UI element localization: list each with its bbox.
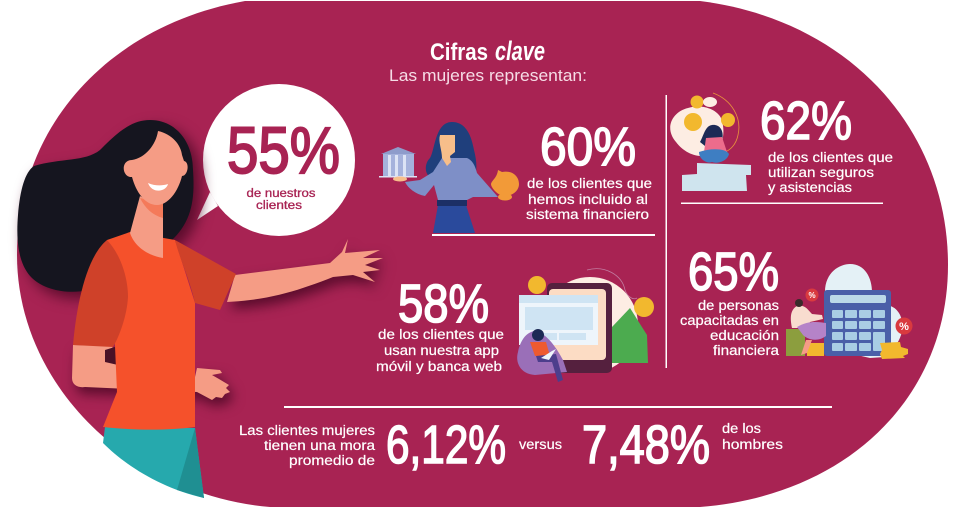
stat: 58%: 58%	[398, 274, 489, 334]
woman hair	[532, 329, 544, 341]
stat: 62%: de los clientes que	[768, 150, 893, 165]
coins	[880, 342, 908, 359]
stat: 58%: usan nuestra app	[384, 343, 499, 358]
woman top	[791, 306, 823, 328]
stat: 60%: hemos incluido al	[528, 192, 648, 207]
calculator body	[824, 290, 891, 356]
browser bar	[519, 295, 598, 303]
woman leg	[801, 340, 812, 355]
stat: 58%: de los clientes que	[378, 327, 504, 342]
men's note: hombres	[722, 437, 783, 452]
men's note	[722, 421, 783, 452]
bottom note: women's arrears: Las clientes mujeres	[239, 423, 375, 438]
orbit	[713, 93, 739, 152]
skirt	[433, 205, 475, 233]
divider lines	[284, 95, 883, 408]
percent bubble large: %	[899, 321, 909, 333]
coin left	[528, 276, 546, 294]
icon: calculator with woman and coins	[786, 264, 912, 359]
trousers	[103, 427, 204, 498]
title: clave	[495, 36, 545, 66]
icon: tablet, browser, money and woman on beanbag	[517, 269, 654, 382]
stat: 62%: 62%	[760, 91, 852, 151]
stat: 65%: educación	[710, 328, 779, 343]
banknotes	[612, 308, 648, 363]
calculator display	[830, 295, 886, 303]
speech bubble: 55%: 55%	[227, 113, 340, 187]
stat: 6,12%: 6,12%	[386, 415, 506, 475]
coin right	[634, 297, 654, 317]
stack of papers	[682, 163, 751, 191]
shirt	[103, 232, 195, 430]
title	[430, 36, 545, 66]
title: Cifras	[430, 39, 488, 66]
face	[124, 131, 188, 205]
speech bubble: 55%	[197, 84, 355, 236]
versus label: versus	[519, 437, 562, 452]
icon: woman meditating on stacks with coins	[670, 93, 751, 191]
woman hair	[795, 299, 803, 307]
calculator keys	[832, 310, 885, 351]
body	[704, 137, 727, 152]
beanbag	[517, 331, 567, 375]
hand left	[393, 176, 407, 182]
bank	[379, 147, 417, 178]
stat: 65%: de personas	[698, 298, 779, 313]
right sleeve	[175, 240, 236, 310]
stat: 60%: sistema financiero	[526, 207, 649, 222]
stat: 65%: capacitadas en	[680, 313, 779, 328]
icon: woman with bank and piggy bank	[379, 122, 519, 233]
belt	[437, 200, 467, 206]
woman skirt	[797, 322, 826, 340]
subtitle: Las mujeres representan:	[389, 67, 587, 85]
hair	[426, 122, 476, 185]
money stack	[786, 329, 805, 356]
stat: 60%: de los clientes que	[527, 176, 652, 191]
stat: 7,48%: 7,48%	[582, 415, 710, 475]
bottom note: women's arrears: promedio de	[289, 453, 375, 468]
back circle	[542, 277, 638, 373]
hand right	[498, 194, 512, 200]
tablet screen	[549, 289, 606, 360]
cloud	[825, 264, 903, 358]
legs	[699, 149, 729, 163]
squiggle	[587, 269, 637, 299]
neck shadow	[140, 198, 163, 218]
browser window	[519, 295, 598, 345]
underarm shadow	[105, 346, 118, 365]
yellow block	[807, 343, 824, 356]
trousers shade	[177, 428, 204, 498]
laptop	[541, 349, 556, 360]
stat: 65%: financiera	[713, 343, 780, 358]
tablet	[547, 283, 612, 373]
woman presenting illustration	[17, 120, 383, 498]
stat: 65%: 65%	[688, 242, 779, 302]
left sleeve	[73, 240, 128, 347]
browser buttons	[540, 333, 586, 340]
bottom note: women's arrears	[239, 423, 376, 468]
left arm lower	[72, 345, 230, 400]
right arm and hand	[227, 239, 383, 302]
hair	[700, 125, 723, 150]
men's note: de los	[722, 421, 761, 436]
stat: 65%	[680, 242, 780, 358]
browser content	[525, 307, 593, 330]
hair	[17, 120, 194, 292]
woman legs	[536, 354, 563, 382]
woman body	[530, 342, 550, 356]
stat: 62%	[760, 91, 893, 195]
neck	[130, 196, 163, 258]
face	[439, 135, 455, 166]
stat: 60%: 60%	[540, 117, 636, 177]
smile	[148, 183, 168, 191]
bottom note: women's arrears: tienen una mora	[264, 438, 376, 453]
torso and arms	[405, 158, 498, 200]
blob	[670, 106, 723, 156]
speech bubble: 55%: clientes	[256, 200, 302, 212]
stat: 60%	[526, 117, 652, 222]
percent bubble small: %	[808, 291, 816, 300]
stat: 58%: móvil y banca web	[376, 359, 502, 374]
stat: 62%: utilizan seguros	[768, 165, 874, 180]
speech bubble: 55%: de nuestros	[246, 188, 316, 200]
coins	[690, 96, 704, 108]
stat: 58%	[376, 274, 504, 374]
piggy bank	[491, 170, 519, 196]
stat: 62%: y asistencias	[768, 180, 852, 195]
